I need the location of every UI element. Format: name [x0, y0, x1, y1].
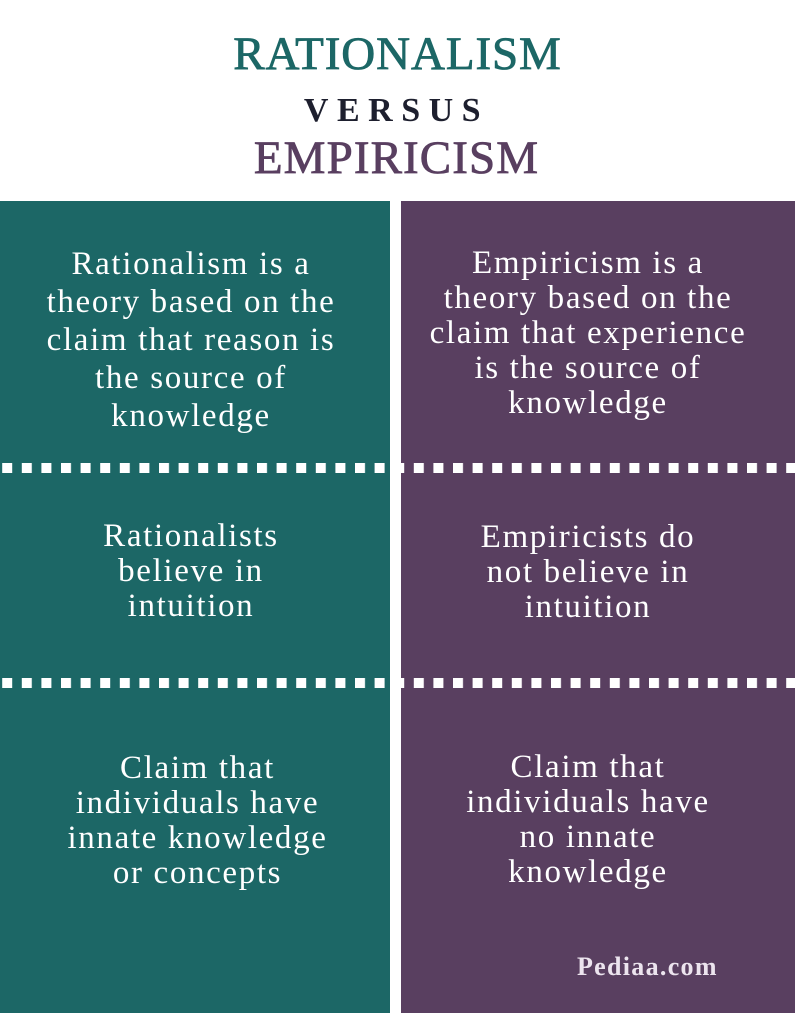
text: rationalists on intuition: intuition	[128, 588, 254, 624]
text: rationalism definition	[46, 246, 335, 434]
text: rationalism innate knowledge: innate knowledge	[67, 820, 328, 856]
text: rationalists on intuition: believe in	[118, 553, 264, 589]
text: empiricism definition: is the source of	[474, 350, 702, 386]
text: empiricism definition	[430, 245, 746, 421]
text: rationalism definition: the source of	[95, 360, 287, 396]
text: rationalism definition: knowledge	[111, 398, 271, 434]
panel: empiricism column	[401, 201, 795, 1013]
text: rationalism definition: Rationalism is a	[71, 246, 311, 282]
text: rationalism innate knowledge	[67, 750, 328, 891]
text: empiricism innate knowledge: Claim that	[511, 749, 665, 785]
text: empiricism innate knowledge	[466, 749, 710, 890]
text: rationalism innate knowledge: or concepts	[113, 855, 282, 891]
text: rationalists on intuition: Rationalists	[103, 518, 279, 554]
text: rationalism definition: claim that reason is	[47, 322, 335, 358]
divider: first dotted row	[2, 463, 795, 473]
title: Rationalism: RATIONALISM	[233, 28, 562, 80]
text: empiricists on intuition: intuition	[525, 589, 651, 625]
logo: Pediaa.com: Pediaa.com	[577, 952, 718, 981]
text: empiricism innate knowledge: no innate	[520, 819, 656, 855]
title: versus: VERSUS	[304, 92, 489, 129]
text: empiricists on intuition: Empiricists do	[481, 519, 695, 555]
text: empiricism definition: Empiricism is a	[472, 245, 704, 281]
text: empiricism definition: claim that experience	[430, 315, 746, 351]
panel: rationalism column	[0, 201, 390, 1013]
text: empiricism definition: theory based on the	[444, 280, 732, 316]
text: rationalism innate knowledge: Claim that	[120, 750, 275, 786]
title: Empiricism: EMPIRICISM	[254, 132, 539, 184]
text: rationalism definition: theory based on the	[47, 284, 335, 320]
text: empiricism innate knowledge: individuals have	[466, 784, 710, 820]
divider: second dotted row	[2, 678, 795, 688]
text: empiricists on intuition: not believe in	[487, 554, 689, 590]
text: rationalism innate knowledge: individuals have	[76, 785, 319, 821]
text: empiricism innate knowledge: knowledge	[508, 854, 668, 890]
text: rationalists on intuition	[103, 518, 279, 624]
text: empiricism definition: knowledge	[508, 385, 668, 421]
text: empiricists on intuition	[481, 519, 695, 625]
